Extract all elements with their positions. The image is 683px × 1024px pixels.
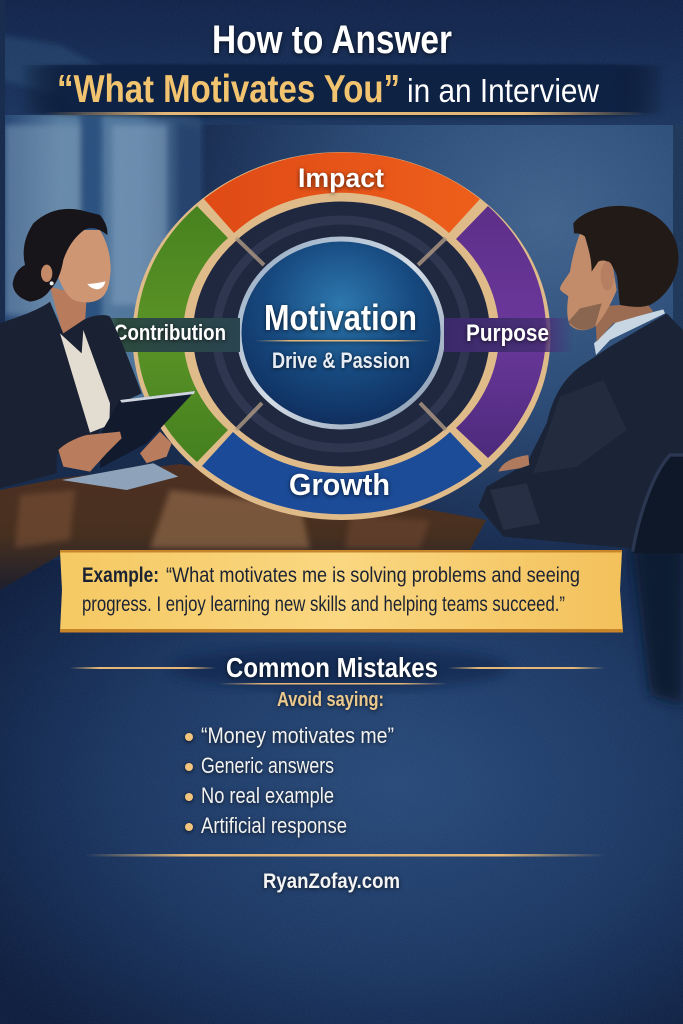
- heading underline: [218, 683, 447, 684]
- title line 1: How to Answer: [212, 18, 452, 62]
- man shirt collar: [594, 309, 665, 355]
- man hair: [573, 206, 678, 307]
- heading rule left: [70, 667, 216, 669]
- callout text line 2: progress. I enjoy learning new skills and helping teams succeed.”: [82, 593, 565, 616]
- footer divider: [85, 854, 605, 856]
- chair back: [633, 457, 683, 553]
- motivation wheel: [97, 152, 574, 520]
- woman hair: [13, 209, 107, 302]
- table: [0, 464, 486, 590]
- title band: [20, 65, 665, 113]
- label: motivation: Motivation: [264, 297, 417, 338]
- heading rule right: [448, 667, 605, 669]
- item 1: “Money motivates me”: [201, 723, 394, 748]
- woman neck: [50, 287, 87, 350]
- woman earring: [50, 281, 54, 285]
- label: growth: Growth: [289, 467, 390, 502]
- heading: Common Mistakes: [226, 652, 438, 683]
- center circle: [239, 239, 443, 427]
- callout paper: [60, 551, 623, 632]
- man hand: [498, 455, 529, 472]
- label: impact: Impact: [298, 163, 384, 193]
- label band: contribution: [97, 318, 240, 352]
- title line 2 highlighted: “What Motivates You”: [57, 68, 400, 111]
- man neck: [595, 303, 653, 342]
- clipboard: [100, 391, 195, 468]
- notebook: [62, 463, 178, 490]
- man stubble: [568, 303, 602, 330]
- item 3: No real example: [201, 783, 334, 808]
- item 4: Artificial response: [201, 813, 347, 838]
- callout text line 1: “What motivates me is solving problems and seeing: [166, 564, 580, 587]
- segment: purpose: [456, 206, 546, 458]
- label band: purpose: [444, 318, 574, 352]
- inner dark ring: [192, 200, 492, 468]
- label: purpose: Purpose: [466, 320, 549, 347]
- woman right hand: [140, 432, 172, 463]
- segment: impact: [204, 152, 480, 233]
- title: [20, 18, 665, 115]
- man face: [560, 230, 617, 330]
- woman left hand: [58, 432, 122, 472]
- item 2: Generic answers: [201, 753, 334, 778]
- common mistakes section: [70, 646, 605, 893]
- center rule: [255, 340, 431, 342]
- man jacket: [478, 313, 683, 553]
- chair fade: [632, 520, 683, 705]
- woman smile: [87, 281, 105, 289]
- man ear: [601, 261, 614, 291]
- section heading band: [170, 646, 510, 690]
- website footer: RyanZofay.com: [263, 870, 400, 893]
- woman blouse: [60, 330, 110, 433]
- wheel base ring: [132, 152, 550, 520]
- callout label: Example:: [82, 564, 159, 587]
- label: drive and passion: Drive & Passion: [272, 348, 410, 373]
- subheading: Avoid saying:: [277, 689, 384, 711]
- spokes: [236, 238, 446, 430]
- man candidate: [478, 206, 683, 553]
- label: contribution: Contribution: [114, 320, 226, 345]
- mistakes list: [185, 723, 394, 838]
- example callout: [60, 550, 623, 632]
- woman jacket: [0, 302, 142, 488]
- segment: contribution: [137, 206, 228, 462]
- woman face: [55, 230, 111, 302]
- title line 2 plain: in an Interview: [407, 72, 599, 109]
- woman interviewer: [0, 209, 195, 490]
- title rule: [45, 112, 645, 115]
- wheel labels: [114, 163, 549, 502]
- segment: growth: [202, 432, 482, 514]
- woman ear: [41, 265, 52, 282]
